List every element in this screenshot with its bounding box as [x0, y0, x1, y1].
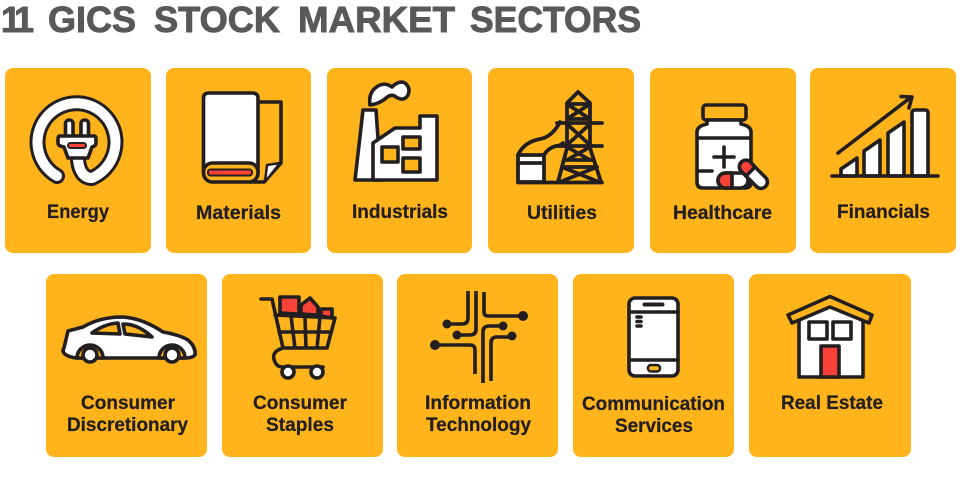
panel: Utilities	[488, 68, 634, 253]
label: Industrials: Industrials	[352, 201, 448, 223]
panel: Consumer Discretionary	[46, 274, 207, 457]
icon: electric plug	[37, 103, 115, 178]
panel: Real Estate	[749, 274, 911, 457]
panel: Financials	[810, 68, 956, 253]
icon: house	[788, 296, 872, 377]
panel: Communication Services	[573, 274, 734, 457]
panel: Materials	[166, 68, 311, 253]
icon: circuit lines	[430, 291, 528, 383]
panel: Industrials	[327, 68, 472, 253]
label: Utilities: Utilities	[527, 202, 597, 224]
icon: smartphone	[629, 298, 678, 376]
label: Information Technology	[425, 392, 531, 436]
label: Consumer Discretionary: Consumer	[81, 392, 175, 414]
icon: factory	[355, 82, 437, 180]
panel: Energy	[5, 68, 151, 253]
label: Consumer Staples: Staples	[266, 414, 334, 436]
title: STOCK	[154, 0, 280, 40]
panel: Information Technology	[397, 274, 558, 457]
label: Energy: Energy	[47, 201, 109, 223]
icon: rising bar chart with arrow	[832, 96, 938, 176]
label: Consumer Staples	[253, 392, 347, 436]
icon: shopping cart	[261, 297, 335, 378]
label: Financials: Financials	[837, 201, 930, 223]
label: Communication Services	[582, 393, 725, 437]
label: Materials: Materials	[196, 202, 281, 224]
label: Healthcare: Healthcare	[673, 202, 772, 224]
label: Information Technology: Technology	[426, 414, 531, 436]
title: 11	[1, 0, 34, 40]
icon: medicine bottle and pills	[697, 105, 767, 188]
title: MARKET	[298, 0, 455, 40]
label: Consumer Discretionary	[67, 392, 188, 436]
panel: Consumer Staples	[222, 274, 383, 457]
label: Communication Services: Communication	[582, 393, 725, 415]
title: SECTORS	[470, 0, 641, 40]
title	[1, 0, 641, 40]
label: Real Estate: Real Estate	[781, 392, 883, 414]
icon: power pylon and plant	[518, 92, 602, 182]
title: GICS	[48, 0, 136, 40]
label: Communication Services: Services	[615, 415, 693, 437]
panel: Healthcare	[650, 68, 796, 253]
icon: rolled material sheet	[204, 93, 281, 182]
icon: car	[63, 317, 195, 362]
label: Consumer Discretionary: Discretionary	[67, 414, 188, 436]
label: Consumer Staples: Consumer	[253, 392, 347, 414]
label: Information Technology: Information	[425, 392, 531, 414]
